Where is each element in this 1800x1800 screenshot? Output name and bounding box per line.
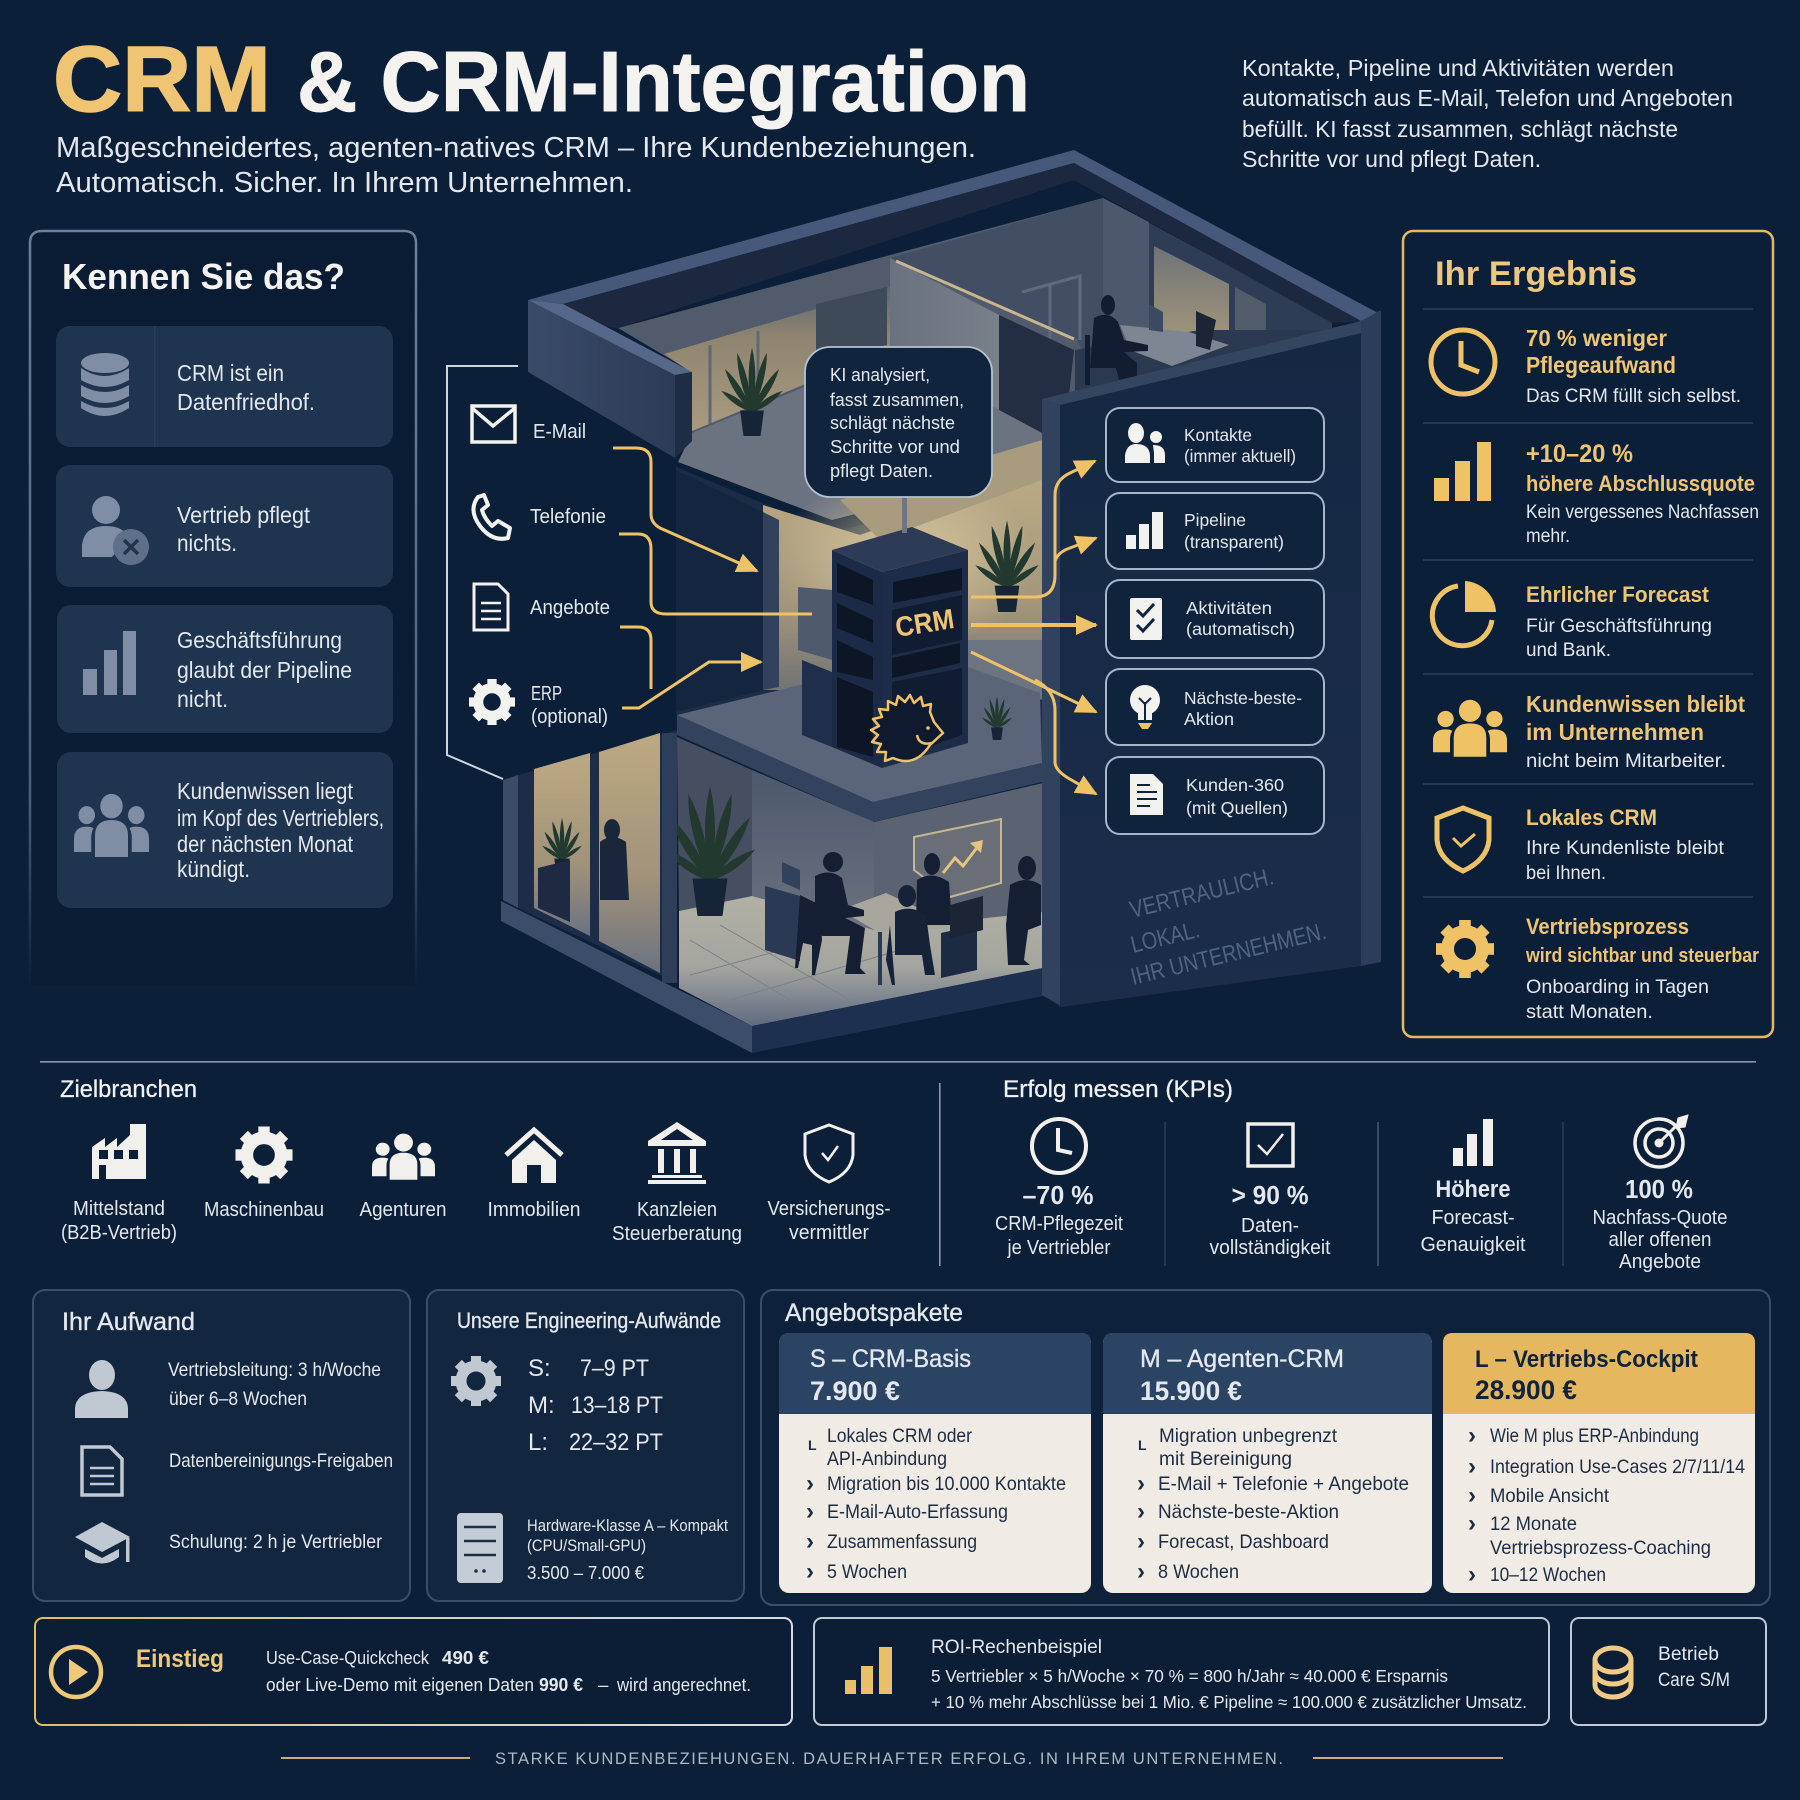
label	[995, 1213, 1123, 1259]
text	[1658, 1644, 1730, 1691]
icon: checkbox	[1248, 1124, 1293, 1166]
text: höhere Abschlussquote	[1526, 471, 1755, 496]
card: Datenfriedhof	[56, 326, 393, 447]
title: & CRM-Integration	[297, 35, 1030, 130]
icon: person with x	[82, 496, 149, 565]
text: und Bank.	[1526, 639, 1611, 661]
source: ERP: (optional)	[531, 706, 608, 728]
plant: small	[981, 696, 1013, 740]
label: (B2B-Vertrieb)	[61, 1222, 177, 1244]
feature list: ›	[1468, 1422, 1476, 1449]
feature list: mit Bereinigung	[1159, 1448, 1292, 1470]
label	[1592, 1207, 1728, 1273]
feature list: Wie M plus ERP-Anbindung	[1490, 1425, 1699, 1447]
feature list: L	[1138, 1437, 1147, 1453]
text	[1186, 598, 1295, 639]
feature list: Zusammenfassung	[827, 1531, 977, 1553]
text	[1526, 325, 1741, 407]
icon: bars	[83, 631, 136, 695]
card: Pipeline	[57, 605, 393, 733]
text: Geschäftsführung	[177, 627, 342, 653]
footer tagline: STARKE KUNDENBEZIEHUNGEN. DAUERHAFTER ERFOLG. IN IHREM UNTERNEHMEN.	[495, 1750, 1283, 1768]
text	[1184, 688, 1302, 729]
effort list: S:	[528, 1355, 551, 1382]
text	[1526, 691, 1745, 772]
item: Versicherungsvermittler	[768, 1125, 890, 1244]
label: Agenturen	[360, 1199, 446, 1221]
effort list	[528, 1355, 663, 1456]
label: Immobilien	[488, 1199, 580, 1221]
icon: server	[457, 1513, 503, 1583]
icon: contacts	[1125, 423, 1165, 463]
output: Aktivitäten	[1106, 580, 1324, 658]
text: Nächste-beste-	[1184, 688, 1302, 708]
feature list: ›	[1137, 1498, 1145, 1525]
CRM server	[798, 527, 968, 768]
label: Mittelstand	[73, 1198, 165, 1220]
text: Für Geschäftsführung	[1526, 615, 1712, 637]
text: Betrieb	[1658, 1644, 1719, 1665]
panel: Kennen Sie das	[30, 231, 416, 985]
text: der nächsten Monat	[177, 831, 354, 857]
feature list: Mobile Ansicht	[1490, 1485, 1610, 1507]
package: S	[779, 1333, 1091, 1593]
icon: gear	[451, 1356, 501, 1406]
KPI: Datenvollständigkeit	[1210, 1124, 1331, 1259]
result: Abschlussquote	[1434, 440, 1759, 547]
text: +10–20 %	[1526, 440, 1633, 468]
item: Mittelstand	[61, 1124, 177, 1244]
text: Kein vergessenes Nachfassen	[1526, 501, 1759, 523]
text: im Kopf des Vertrieblers,	[177, 805, 384, 831]
text: (transparent)	[1184, 532, 1284, 552]
subtitle: Automatisch. Sicher. In Ihrem Unternehmen.	[56, 167, 633, 199]
base slab	[501, 901, 1043, 1053]
label: Angebote	[1619, 1251, 1701, 1273]
feature list: ›	[806, 1558, 814, 1585]
heading: Ihr Ergebnis	[1435, 255, 1637, 293]
offer text	[266, 1647, 751, 1695]
panel: Betrieb	[1571, 1618, 1766, 1725]
package: L: 28.900 €	[1475, 1375, 1577, 1405]
offer text: wird angerechnet.	[616, 1674, 751, 1695]
source: E-Mail	[472, 406, 586, 443]
whiteboard chart	[914, 819, 1001, 897]
feature list: 10–12 Wochen	[1490, 1564, 1606, 1586]
label: vermittler	[789, 1222, 869, 1244]
title	[53, 27, 1030, 131]
icon: document	[1130, 774, 1163, 815]
value: Höhere	[1436, 1176, 1510, 1203]
feature list: Nächste-beste-Aktion	[1158, 1501, 1339, 1523]
package: M	[1103, 1333, 1432, 1593]
icon: graduation cap	[75, 1522, 130, 1564]
icon: document	[82, 1447, 122, 1495]
label: CRM-Pflegezeit	[995, 1213, 1123, 1235]
feature list: ›	[806, 1528, 814, 1555]
offer text: 990 €	[539, 1674, 583, 1695]
label: Nachfass-Quote	[1592, 1207, 1728, 1229]
heading: Kennen Sie das?	[62, 256, 345, 297]
text: Datenfriedhof.	[177, 389, 315, 415]
text: über 6–8 Wochen	[169, 1388, 307, 1410]
offer text: Use-Case-Quickcheck	[266, 1647, 430, 1668]
wall slogan: VERTRAULICH.	[1127, 863, 1276, 924]
section: Erfolg messen	[995, 1076, 1728, 1273]
text: nicht beim Mitarbeiter.	[1526, 750, 1726, 772]
icon: people	[74, 794, 149, 857]
text: nicht.	[177, 686, 228, 712]
intro text	[1242, 55, 1733, 172]
feature list: Vertriebsprozess-Coaching	[1490, 1537, 1711, 1559]
text: Care S/M	[1658, 1670, 1730, 1691]
icon: shield	[1437, 808, 1489, 871]
text: statt Monaten.	[1526, 1001, 1653, 1023]
text	[1526, 805, 1725, 884]
label	[1420, 1207, 1526, 1256]
icon: play	[51, 1647, 101, 1697]
icon: people	[1433, 700, 1507, 757]
icon: factory	[92, 1124, 146, 1179]
result: Vertriebsprozess	[1436, 914, 1759, 1023]
text	[1526, 582, 1712, 661]
feature list: API-Anbindung	[827, 1448, 947, 1470]
section: Zielbranchen	[60, 1076, 890, 1245]
icon: database	[81, 353, 129, 416]
feature list: ›	[1468, 1453, 1476, 1480]
text: Das CRM füllt sich selbst.	[1526, 385, 1741, 407]
intro text: Kontakte, Pipeline und Aktivitäten werden	[1242, 55, 1674, 81]
panel: Angebotspakete	[761, 1290, 1770, 1605]
wall slogan: LOKAL.	[1128, 916, 1202, 959]
text: 70 % weniger	[1526, 325, 1667, 351]
text: glaubt der Pipeline	[177, 657, 352, 683]
offer text: 490 €	[442, 1647, 489, 1668]
text: (immer aktuell)	[1184, 446, 1296, 466]
KPI: Forecast	[1420, 1119, 1526, 1256]
text: bei Ihnen.	[1526, 862, 1606, 884]
feature list: Integration Use-Cases 2/7/11/14	[1490, 1456, 1745, 1478]
text: Vertriebsprozess	[1526, 914, 1689, 939]
text: Kontakte	[1184, 425, 1252, 445]
effort list: L:	[528, 1429, 548, 1456]
feature list	[1137, 1425, 1409, 1585]
heading: Zielbranchen	[60, 1076, 197, 1103]
text: Schulung: 2 h je Vertriebler	[169, 1531, 382, 1553]
callout: KI	[805, 347, 992, 533]
feature list: Migration bis 10.000 Kontakte	[827, 1473, 1066, 1495]
text: Kundenwissen liegt	[177, 778, 354, 804]
icon: people	[372, 1134, 435, 1180]
text: Kunden-360	[1186, 775, 1284, 795]
package: M: M – Agenten-CRM	[1140, 1345, 1344, 1373]
output: Nächste-beste-Aktion	[1106, 669, 1324, 745]
text: Aktion	[1184, 709, 1234, 729]
feature list: E-Mail-Auto-Erfassung	[827, 1501, 1008, 1523]
feature list: 5 Wochen	[827, 1561, 907, 1583]
effort list: M:	[528, 1392, 555, 1419]
offer text: –	[598, 1674, 609, 1695]
feature list: E-Mail + Telefonie + Angebote	[1158, 1473, 1409, 1495]
effort list: 13–18 PT	[571, 1392, 663, 1419]
wall slogan	[1127, 863, 1329, 991]
text: wird sichtbar und steuerbar	[1525, 945, 1759, 967]
package: L	[1443, 1333, 1755, 1593]
feature list: ›	[806, 1470, 814, 1497]
output: Pipeline	[1106, 493, 1324, 569]
card: Vertrieb pflegt nichts	[56, 465, 393, 587]
arrows: outputs	[971, 461, 1096, 794]
panel: Ihr Ergebnis	[1403, 231, 1773, 1037]
item: Vertriebsleitung	[75, 1359, 381, 1418]
calculation: 5 Vertriebler × 5 h/Woche × 70 % = 800 h/Jahr ≈ 40.000 € Ersparnis	[931, 1666, 1448, 1686]
intro text: Schritte vor und pflegt Daten.	[1242, 146, 1541, 172]
offer text: oder Live-Demo mit eigenen Daten	[266, 1674, 534, 1695]
output: Kunden-360	[1106, 757, 1324, 834]
label: Steuerberatung	[612, 1223, 742, 1245]
text	[1184, 425, 1296, 466]
result: Lokales CRM	[1437, 805, 1725, 884]
subtitle: Maßgeschneidertes, agenten-natives CRM – Ihre Kundenbeziehungen.	[56, 132, 976, 164]
source: Angebote: Angebote	[530, 597, 610, 619]
text: kündigt.	[177, 856, 250, 882]
package: S: S – CRM-Basis	[810, 1345, 971, 1373]
result: Forecast	[1432, 581, 1712, 661]
label	[612, 1199, 742, 1245]
panel: data sources	[447, 366, 676, 779]
upper floor	[618, 198, 1340, 520]
lower floor room	[447, 300, 1381, 1053]
intro text: befüllt. KI fasst zusammen, schlägt nächste	[1242, 116, 1678, 142]
output: Kontakte	[1106, 408, 1324, 482]
icon: shield	[805, 1125, 853, 1182]
text: Aktivitäten	[1186, 598, 1272, 618]
feature list: ›	[1137, 1528, 1145, 1555]
package: S: 7.900 €	[810, 1376, 900, 1406]
text	[177, 360, 315, 415]
source: ERP	[469, 679, 608, 728]
icon: gear	[1436, 920, 1494, 978]
text: Ehrlicher Forecast	[1526, 582, 1709, 607]
arrows: inputs	[613, 448, 812, 708]
text	[168, 1359, 381, 1410]
icon: clock	[1431, 330, 1495, 394]
icon: ROI bars	[845, 1647, 892, 1694]
icon: clock	[1032, 1119, 1086, 1173]
callout: KI: fasst zusammen,	[830, 389, 964, 410]
heading: Ihr Aufwand	[62, 1308, 195, 1336]
icon: target	[1635, 1115, 1688, 1167]
text: Pipeline	[1184, 510, 1246, 530]
text: im Unternehmen	[1526, 719, 1704, 745]
text: Pflegeaufwand	[1526, 352, 1676, 378]
label: aller offenen	[1608, 1229, 1712, 1251]
hardware text: Hardware-Klasse A – Kompakt	[527, 1517, 728, 1535]
item: Maschinenbau	[204, 1126, 324, 1221]
label: CRM: CRM	[893, 603, 956, 643]
label: Versicherungs-	[768, 1198, 890, 1220]
value: –70 %	[1022, 1180, 1094, 1210]
text	[177, 778, 384, 882]
icon: person	[75, 1360, 128, 1418]
callout: KI: Schritte vor und	[830, 436, 960, 457]
KPI: Nachfass-Quote	[1592, 1115, 1728, 1273]
text: Onboarding in Tagen	[1526, 976, 1709, 998]
callout: KI: schlägt nächste	[830, 412, 955, 433]
text	[177, 627, 352, 712]
text: mehr.	[1526, 525, 1570, 547]
KPI: Pflegezeit	[995, 1119, 1123, 1259]
text	[1184, 510, 1284, 552]
icon: bars	[1434, 442, 1491, 501]
value: > 90 %	[1232, 1180, 1308, 1210]
label	[1210, 1215, 1331, 1259]
wall slogan: IHR UNTERNEHMEN.	[1128, 918, 1329, 991]
icon: bulb	[1130, 685, 1160, 729]
calculation	[931, 1666, 1527, 1712]
feature list: ›	[1137, 1558, 1145, 1585]
icon: coins	[1595, 1648, 1631, 1697]
icon: bars	[1453, 1119, 1493, 1166]
feature list: ›	[1468, 1561, 1476, 1588]
heading: Einstieg	[136, 1645, 224, 1673]
label: Kanzleien	[637, 1199, 717, 1221]
hedgehog	[871, 695, 943, 761]
text: Vertrieb pflegt	[177, 502, 311, 528]
feature list: Forecast, Dashboard	[1158, 1531, 1329, 1553]
hardware text	[527, 1517, 728, 1583]
item: Datenbereinigung	[82, 1447, 393, 1495]
feature list: ›	[1468, 1510, 1476, 1537]
panel: Engineering-Aufwände	[427, 1290, 744, 1601]
label: Forecast-	[1432, 1207, 1514, 1229]
source: Telefonie	[473, 495, 606, 539]
label	[61, 1198, 177, 1244]
feature list: Migration unbegrenzt	[1159, 1425, 1338, 1447]
text: Ihre Kundenliste bleibt	[1526, 837, 1725, 859]
heading: Angebotspakete	[785, 1299, 963, 1327]
left glass room	[503, 730, 677, 983]
feature list: ›	[1468, 1482, 1476, 1509]
mid floor room	[676, 440, 1043, 822]
calculation: + 10 % mehr Abschlüsse bei 1 Mio. € Pipeline ≈ 100.000 € zusätzlicher Umsatz.	[931, 1692, 1527, 1712]
source: ERP: ERP	[531, 683, 562, 705]
person at desk	[1085, 295, 1229, 385]
heading: Erfolg messen (KPIs)	[1003, 1076, 1233, 1103]
icon: pie	[1432, 581, 1496, 646]
icon: gear	[236, 1126, 292, 1184]
package: L: L – Vertriebs-Cockpit	[1475, 1346, 1698, 1373]
subtitle	[56, 132, 976, 199]
icon: bars	[1126, 512, 1163, 549]
text	[1526, 440, 1759, 547]
item: Immobilien	[488, 1130, 580, 1221]
feature list	[1468, 1422, 1745, 1588]
effort list: 22–32 PT	[569, 1429, 663, 1456]
text	[1186, 775, 1288, 818]
callout: KI: KI analysiert,	[830, 364, 930, 385]
text: (automatisch)	[1186, 619, 1295, 639]
feature list	[806, 1425, 1066, 1585]
text: Lokales CRM	[1526, 805, 1657, 830]
label: je Vertriebler	[1007, 1237, 1111, 1259]
effort list: 7–9 PT	[580, 1355, 649, 1382]
title: CRM	[53, 27, 271, 131]
feature list: 8 Wochen	[1158, 1561, 1239, 1583]
icon: house	[506, 1130, 562, 1183]
text	[177, 502, 311, 556]
text: nichts.	[177, 530, 237, 556]
callout: KI: pflegt Daten.	[830, 460, 933, 481]
item: Agenturen	[360, 1134, 446, 1221]
front-left wall	[528, 300, 692, 458]
roof rim	[528, 150, 1378, 328]
source: E-Mail: E-Mail	[533, 421, 586, 443]
text: Datenbereinigungs-Freigaben	[169, 1450, 393, 1472]
item: Schulung	[75, 1522, 382, 1564]
label: Maschinenbau	[204, 1199, 324, 1221]
feature list: 12 Monate	[1490, 1513, 1577, 1535]
text: Kundenwissen bleibt	[1526, 691, 1745, 717]
hardware text: (CPU/Small-GPU)	[527, 1537, 646, 1555]
text: (mit Quellen)	[1186, 798, 1288, 818]
label	[768, 1198, 890, 1244]
feature list: ›	[1137, 1470, 1145, 1497]
icon: checklist	[1130, 598, 1162, 640]
plant: upper	[720, 348, 784, 436]
intro text: automatisch aus E-Mail, Telefon und Angeboten	[1242, 85, 1733, 111]
front right wall	[1042, 310, 1381, 1007]
text: Vertriebsleitung: 3 h/Woche	[168, 1359, 381, 1381]
text	[1525, 914, 1759, 1023]
result: Pflegeaufwand	[1431, 325, 1741, 407]
source: Angebote	[474, 584, 610, 630]
heading: Unsere Engineering-Aufwände	[457, 1308, 721, 1333]
heading: ROI-Rechenbeispiel	[931, 1637, 1102, 1658]
meeting table and people	[765, 852, 1041, 985]
label: Daten-	[1241, 1215, 1299, 1237]
panel: Einstieg	[35, 1618, 792, 1725]
card: Kundenwissen	[57, 752, 393, 908]
panel: Ihr Aufwand	[33, 1290, 410, 1601]
feature list: L	[808, 1437, 817, 1453]
value: 100 %	[1625, 1174, 1693, 1204]
item: Kanzleien	[612, 1122, 742, 1245]
source: Telefonie: Telefonie	[530, 506, 606, 528]
plant: lower	[662, 786, 758, 916]
text: CRM ist ein	[177, 360, 284, 386]
label: vollständigkeit	[1210, 1237, 1331, 1259]
icon: courthouse	[648, 1122, 706, 1184]
panel: ROI	[814, 1618, 1549, 1725]
result: Kundenwissen	[1433, 691, 1745, 772]
package: M: 15.900 €	[1140, 1376, 1242, 1406]
plant: mid	[974, 520, 1040, 612]
feature list: ›	[806, 1498, 814, 1525]
feature list: Lokales CRM oder	[827, 1425, 972, 1447]
hardware text: 3.500 – 7.000 €	[527, 1562, 645, 1583]
label: Genauigkeit	[1420, 1234, 1526, 1256]
